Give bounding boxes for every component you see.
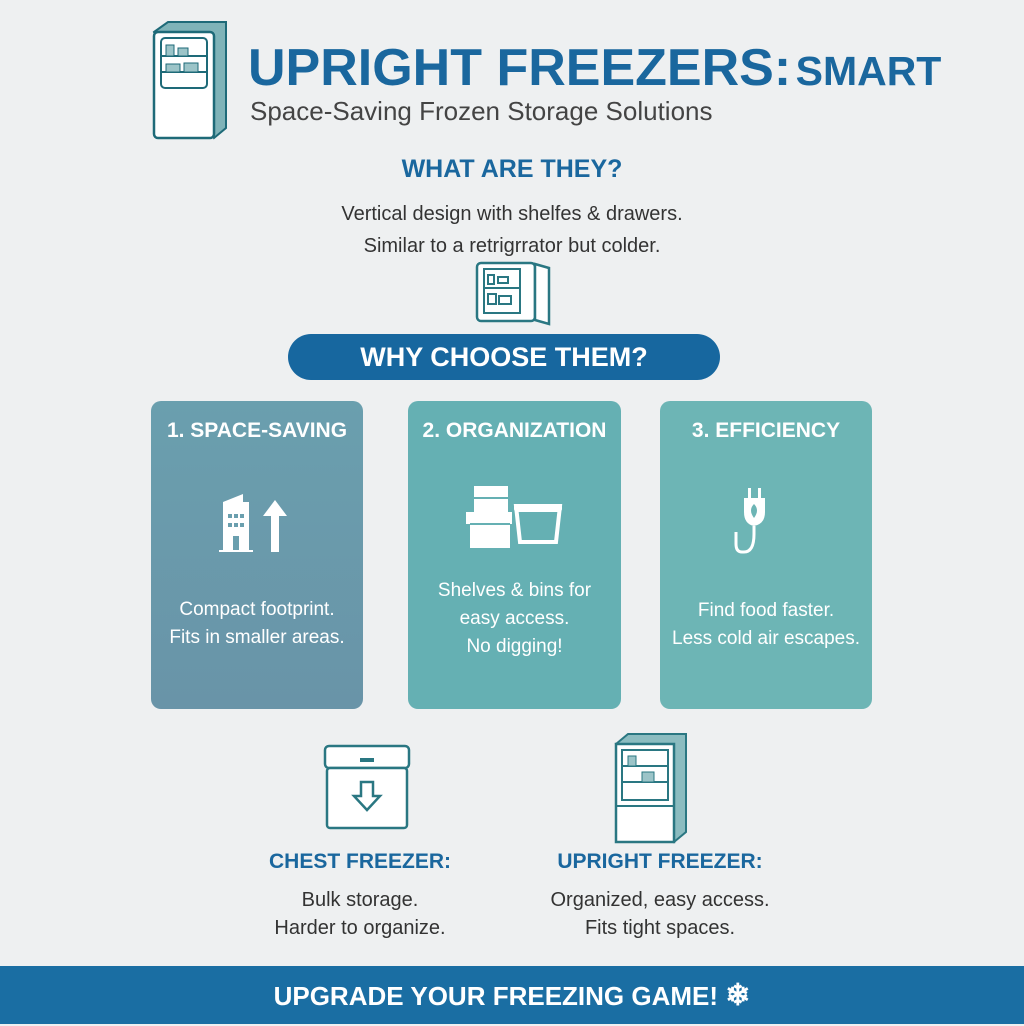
text: definition: Similar to a retrigrrator but colder.	[364, 235, 660, 257]
panel: space-saving: 1. SPACE-SAVING	[167, 419, 347, 442]
panel: efficiency: Less cold air escapes.	[672, 628, 860, 649]
icon: eco plug	[734, 488, 765, 554]
panel: space-saving: Fits in smaller areas.	[169, 627, 345, 648]
banner: why choose them: WHY CHOOSE THEM?	[360, 342, 648, 372]
text: definition: Vertical design with shelfes & drawers.	[341, 203, 683, 225]
panel: organization: 2. ORGANIZATION	[423, 419, 606, 442]
panel: space-saving: Compact footprint.	[179, 599, 335, 620]
header icon: upright freezer	[152, 21, 227, 140]
comparison: chest freezer	[269, 850, 451, 939]
footer banner: UPGRADE YOUR FREEZING GAME! ❄	[274, 979, 750, 1012]
panel: efficiency	[660, 401, 872, 709]
footer banner	[0, 966, 1024, 1024]
panel: efficiency: 3. EFFICIENCY	[692, 419, 840, 442]
panel: organization: easy access.	[460, 608, 569, 629]
heading: what are they: WHAT ARE THEY?	[402, 155, 622, 183]
panel: space-saving	[151, 401, 363, 709]
comparison: upright freezer: Organized, easy access.	[550, 889, 770, 911]
icon: chest freezer	[324, 744, 410, 830]
title: UPRIGHT FREEZERS: SMART	[248, 39, 941, 97]
panel: organization: Shelves & bins for	[438, 580, 591, 601]
icon: upright freezer	[614, 733, 687, 844]
comparison: chest freezer: Harder to organize.	[274, 917, 446, 939]
comparison: upright freezer	[550, 850, 770, 939]
icon: building and arrow	[219, 494, 287, 552]
panel: organization	[408, 401, 621, 709]
comparison: chest freezer: CHEST FREEZER:	[269, 850, 451, 873]
banner: why choose them	[288, 334, 720, 380]
panel: organization: No digging!	[466, 636, 563, 657]
comparison: upright freezer: UPRIGHT FREEZER:	[557, 850, 763, 873]
comparison: chest freezer: Bulk storage.	[302, 889, 418, 911]
comparison: upright freezer: Fits tight spaces.	[585, 917, 735, 939]
icon: open freezer	[476, 262, 550, 326]
subtitle: Space-Saving Frozen Storage Solutions	[250, 96, 712, 126]
icon: boxes and bin	[466, 486, 562, 548]
panel: efficiency: Find food faster.	[698, 600, 834, 621]
text: definition	[341, 203, 683, 257]
